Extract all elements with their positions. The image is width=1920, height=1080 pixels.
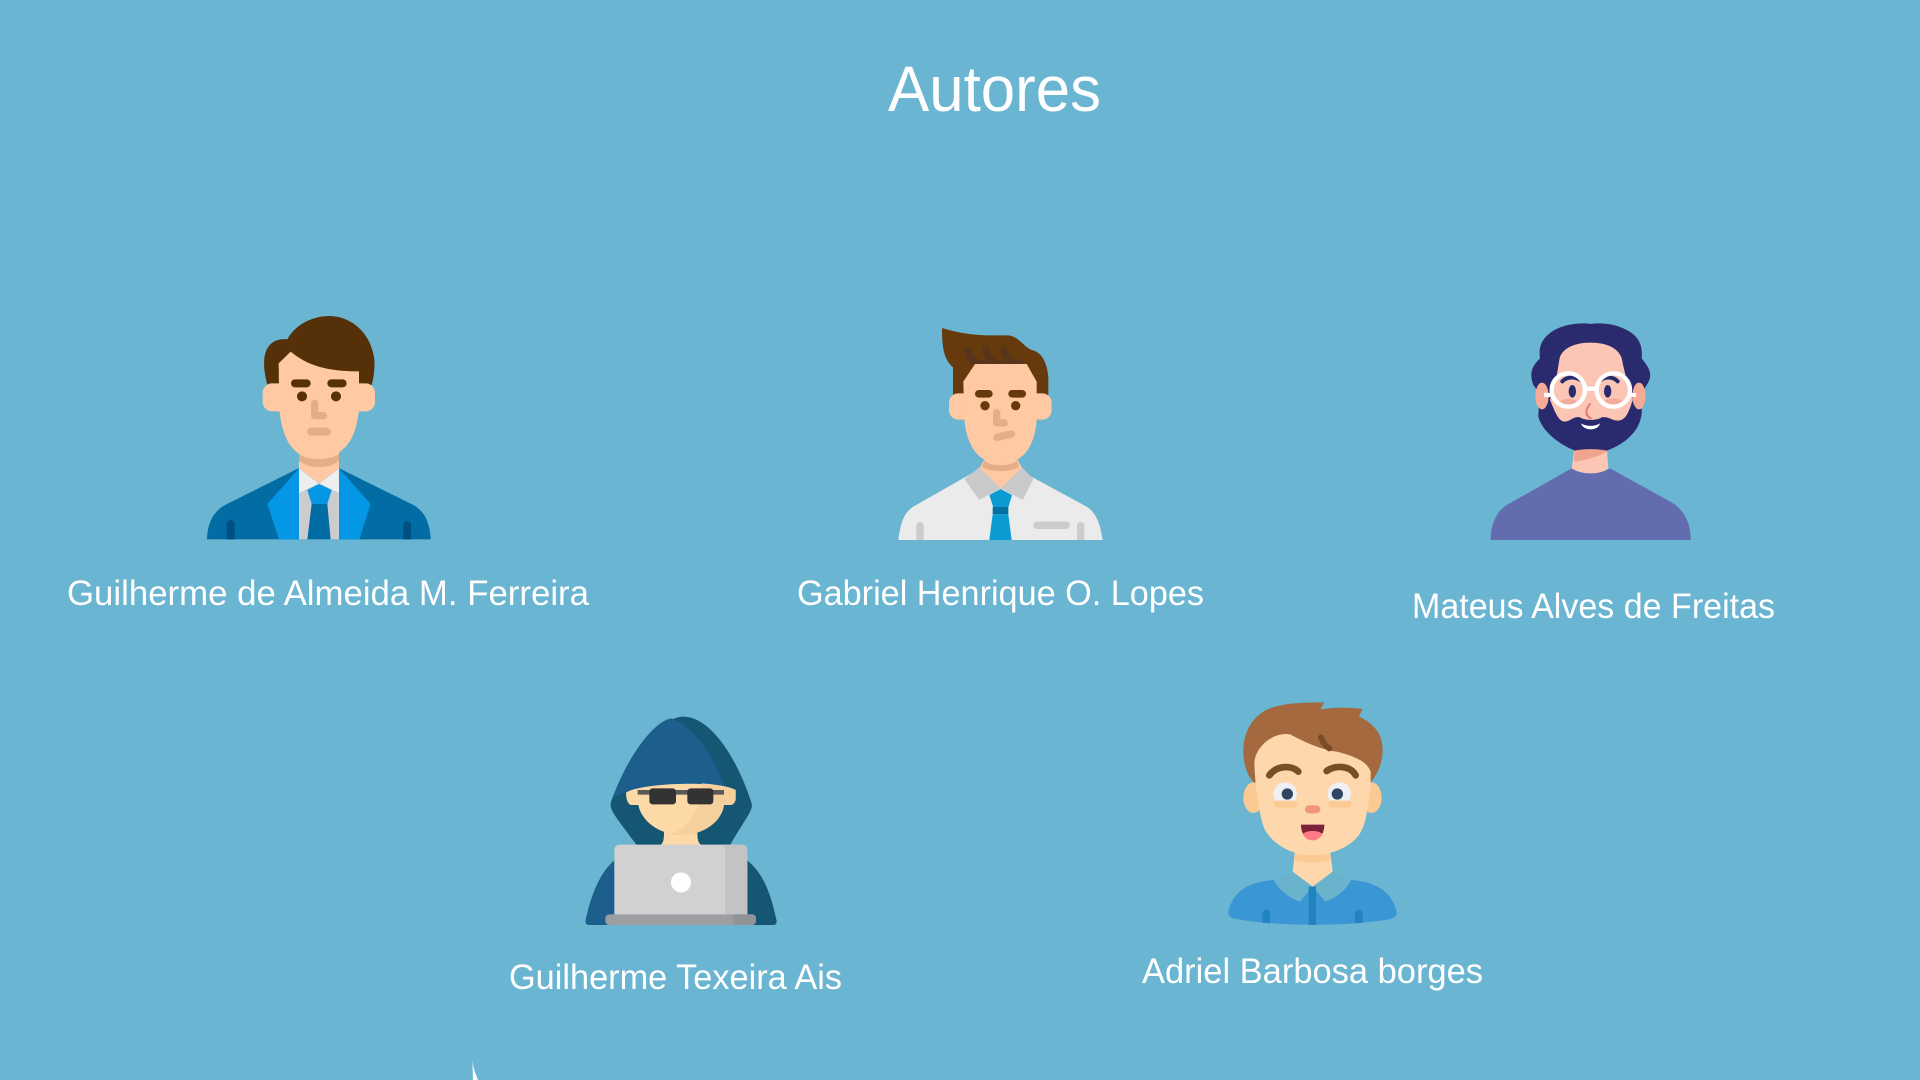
avatar: Gabriel Henrique O. Lopes xyxy=(898,328,1103,540)
avatar: Mateus Alves de Freitas xyxy=(1491,323,1691,540)
name: Mateus Alves de Freitas: Mateus Alves de Freitas xyxy=(1412,587,1775,626)
title: Autores xyxy=(888,53,1101,125)
name: Guilherme de Almeida M. Ferreira: Guilherme de Almeida M. Ferreira xyxy=(67,574,590,613)
white pointer tip at bottom edge xyxy=(472,1060,478,1080)
name: Gabriel Henrique O. Lopes: Gabriel Henrique O. Lopes xyxy=(797,574,1204,613)
name: Adriel Barbosa borges: Adriel Barbosa borges xyxy=(1142,952,1483,991)
name: Guilherme Texeira Ais: Guilherme Texeira Ais xyxy=(509,958,842,997)
avatar: Guilherme Texeira Ais xyxy=(586,717,777,925)
avatar: Guilherme de Almeida M. Ferreira xyxy=(207,316,431,539)
avatar: Adriel Barbosa borges xyxy=(1228,702,1397,925)
